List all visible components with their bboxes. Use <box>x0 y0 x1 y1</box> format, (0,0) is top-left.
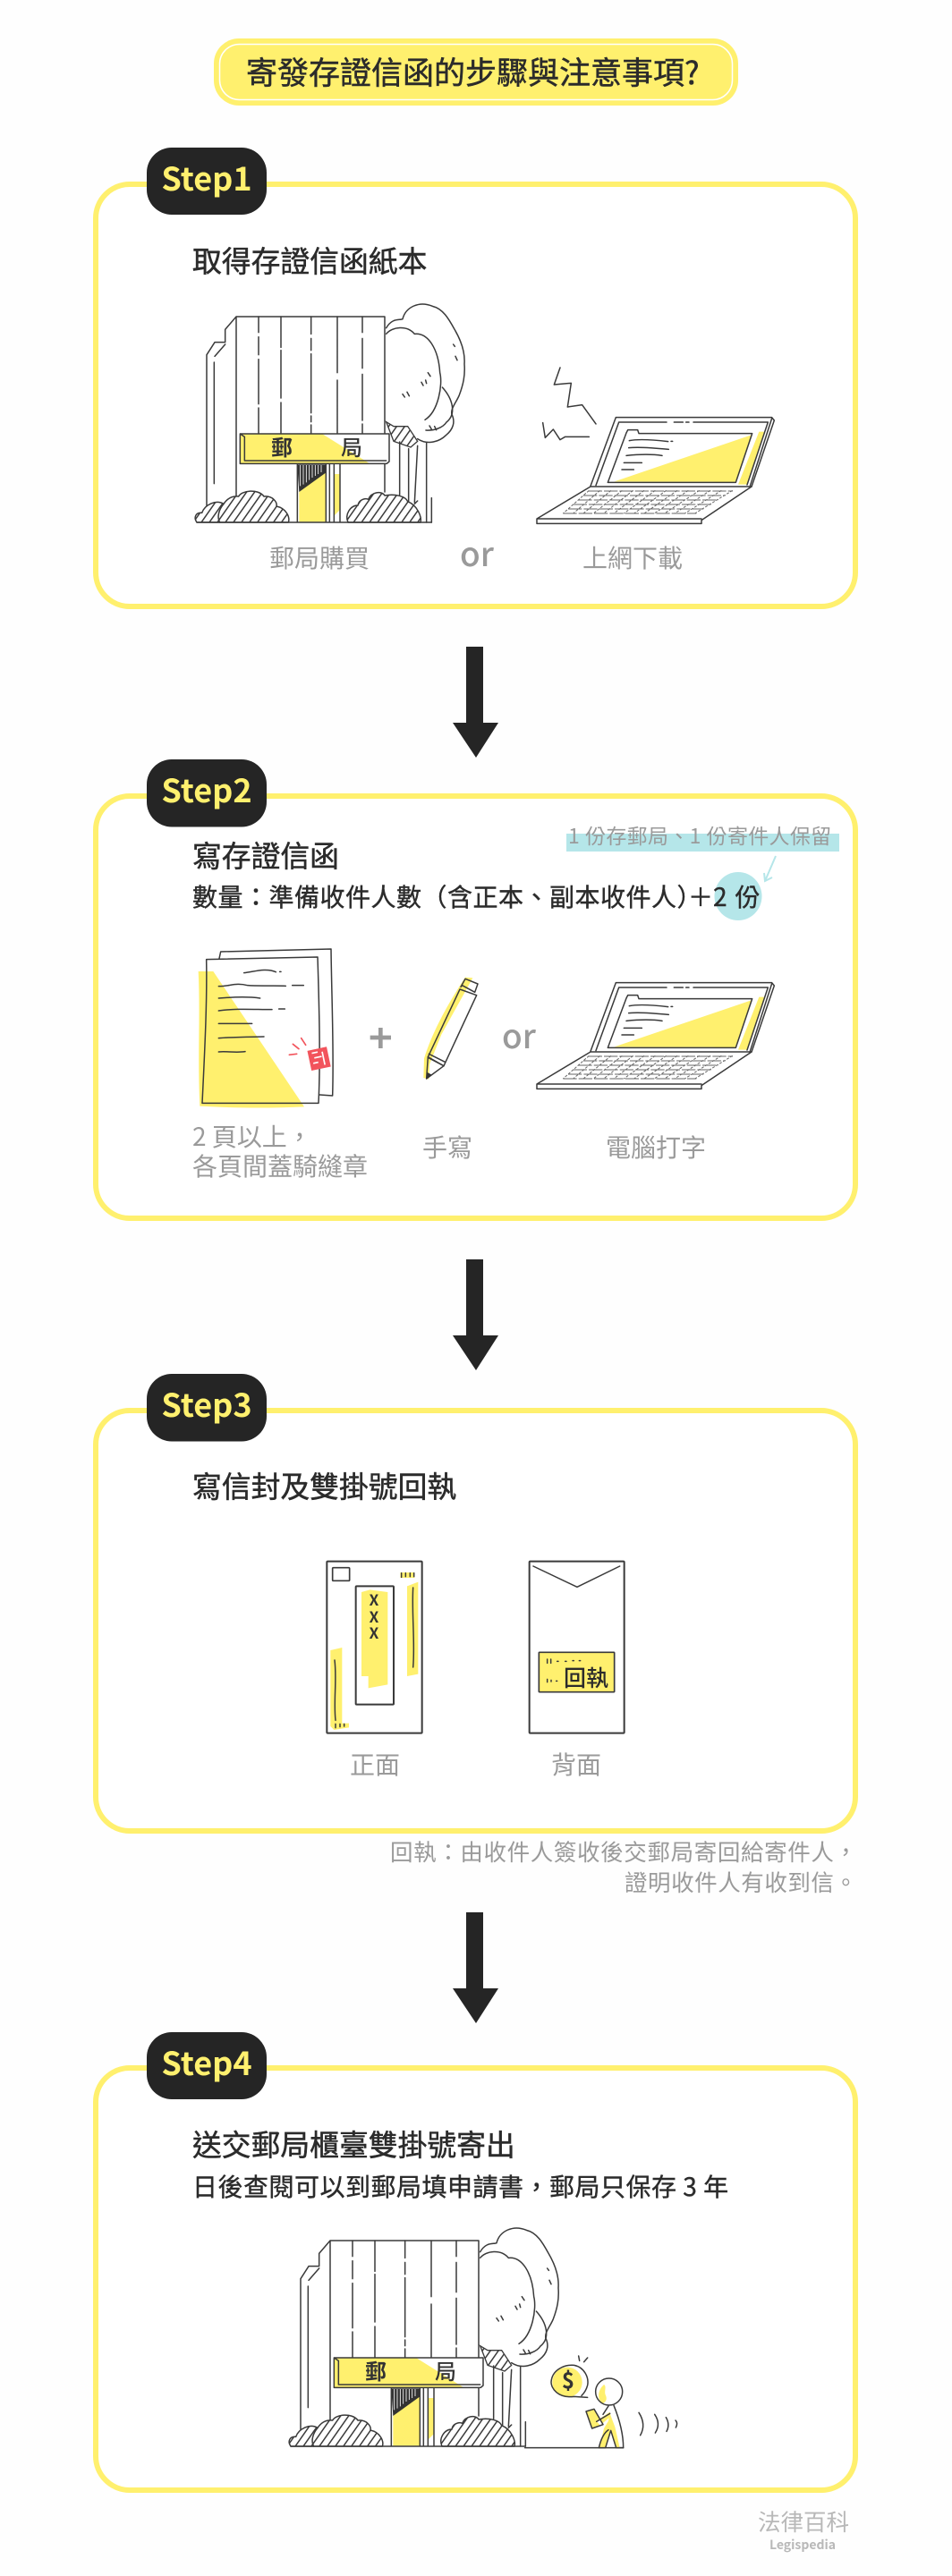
quantity line: 2 <box>713 878 727 914</box>
note: return receipt explanation <box>390 1835 857 1898</box>
icon: plus <box>370 1028 391 1048</box>
panel: step 3 <box>96 1374 855 1831</box>
label: post office purchase: 郵局購買 <box>269 539 370 575</box>
step 4 subtext: 日後查閱可以到郵局填申請書，郵局只保存 3 年 <box>192 2168 729 2204</box>
step 4 badge <box>147 2032 267 2099</box>
label: pages note <box>192 1118 368 1183</box>
step 3 heading: 寫信封及雙掛號回執 <box>192 1464 456 1506</box>
arrow: step 2 to 3 <box>453 1259 498 1370</box>
icon: post office with tree <box>195 304 464 522</box>
step 3 badge: Step3 <box>161 1380 252 1427</box>
icon: envelope back with return receipt <box>530 1562 625 1733</box>
quantity line: 份 <box>735 878 761 914</box>
or: or <box>460 528 495 576</box>
step 1 badge: Step1 <box>161 154 252 200</box>
step 1 heading: 取得存證信函紙本 <box>192 239 427 281</box>
label: online download: 上網下載 <box>582 539 683 575</box>
icon: envelope front: X <box>370 1588 379 1610</box>
arrow: step 1 to 2 <box>453 647 498 758</box>
icon: envelope front <box>327 1562 422 1733</box>
icon: person with money bubble <box>525 2356 677 2448</box>
icon: signed document pages <box>199 949 333 1108</box>
label: front: 正面 <box>350 1746 400 1782</box>
icon: post office with tree: 局 <box>435 2354 456 2385</box>
icon: envelope back with return receipt: 回執 <box>564 1661 608 1693</box>
icon: person with money bubble: $ <box>562 2363 574 2394</box>
note: return receipt explanation: 證明收件人有收到信。 <box>625 1865 857 1898</box>
label: back: 背面 <box>551 1746 601 1782</box>
icon: envelope front: X <box>370 1621 379 1643</box>
icon: post office with tree: 郵 <box>365 2354 387 2385</box>
footer logo: 法律百科 <box>758 2504 849 2538</box>
step 2 heading: 寫存證信函 <box>192 834 339 876</box>
quantity line: ＋ <box>688 878 714 914</box>
label: pages note: 各頁間蓋騎縫章 <box>192 1148 368 1183</box>
icon: laptop <box>537 983 774 1089</box>
icon: post office with tree <box>289 2228 558 2446</box>
step 1 badge <box>147 148 267 215</box>
label: pages note: 2 頁以上， <box>192 1118 312 1154</box>
step 4 badge: Step4 <box>161 2038 252 2085</box>
panel: step 1 <box>96 148 855 606</box>
quantity line: 數量：準備收件人數（含正本、副本收件人） <box>192 878 702 914</box>
step 2 badge: Step2 <box>161 766 252 812</box>
footer logo: Legispedia <box>769 2536 836 2554</box>
title: 寄發存證信函的步驟與注意事項? <box>246 48 700 94</box>
note: return receipt explanation: 回執：由收件人簽收後交郵局寄回給寄件人， <box>390 1835 857 1868</box>
panel: step 4 <box>96 2032 855 2490</box>
icon: laptop download <box>537 368 774 523</box>
panel: step 2 <box>96 759 855 1218</box>
callout: copies note: 1 份存郵局、1 份寄件人保留 <box>568 819 831 850</box>
icon: post office with tree: 局 <box>341 430 362 462</box>
icon: pencil <box>423 978 478 1080</box>
title <box>214 38 738 106</box>
step 3 badge <box>147 1374 267 1442</box>
label: typed on computer: 電腦打字 <box>606 1129 706 1165</box>
step 4 heading: 送交郵局櫃臺雙掛號寄出 <box>192 2123 515 2165</box>
callout: copies note <box>566 819 839 920</box>
icon: envelope front: X <box>370 1605 379 1627</box>
footer logo <box>758 2504 849 2554</box>
icon: post office with tree: 郵 <box>271 430 293 462</box>
arrow: step 3 to 4 <box>453 1912 498 2023</box>
or: or <box>502 1010 537 1058</box>
step 2 badge <box>147 759 267 826</box>
label: handwritten: 手寫 <box>422 1129 472 1165</box>
